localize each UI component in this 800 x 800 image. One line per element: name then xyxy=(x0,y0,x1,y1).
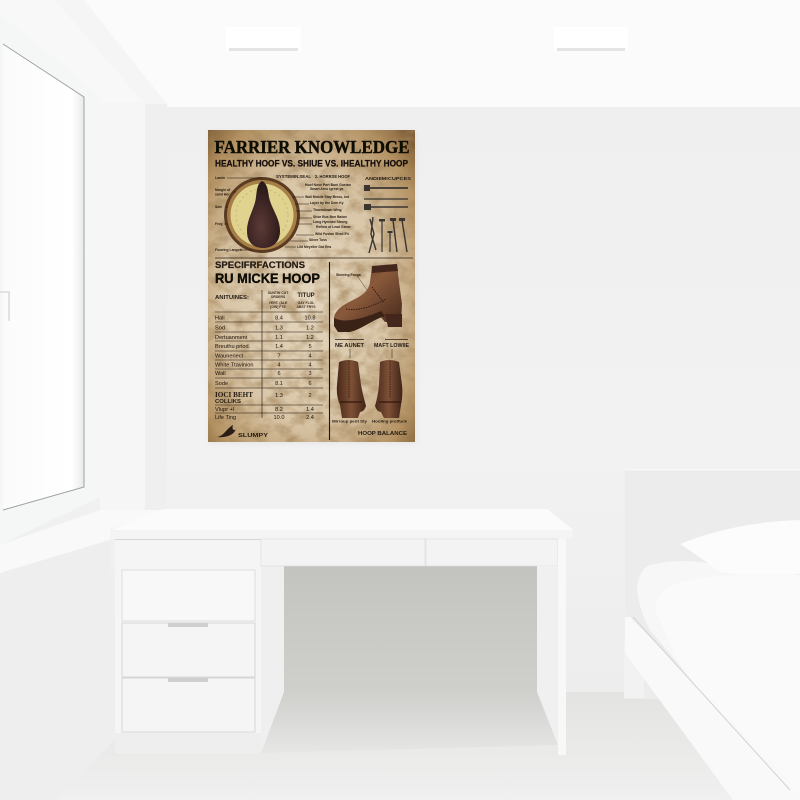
hoof right labels xyxy=(285,183,352,249)
rear boot left xyxy=(337,360,366,418)
boot captions: Mirroup pent Sty xyxy=(332,420,367,424)
column divider xyxy=(328,262,330,440)
table rows: 10.8 xyxy=(305,316,315,322)
table header: ORDERS xyxy=(271,295,286,299)
cabinet side panel xyxy=(261,566,284,753)
table rows: 2 xyxy=(308,393,312,399)
nail illustrations xyxy=(364,185,408,253)
poster subtitle: HEALTHY HOOF VS. SHIUE VS. IHEALTHY HOOP xyxy=(215,158,408,168)
floor xyxy=(55,692,800,800)
hoof right labels: Hoof Nose Port Buni Gustan xyxy=(305,183,351,187)
table rows: 6 xyxy=(277,371,281,377)
table header: YERT. (ALE xyxy=(269,301,288,305)
table rows: 1.3 xyxy=(275,326,283,332)
window reveal wall xyxy=(100,102,167,517)
hoof left labels: Sole xyxy=(215,205,222,209)
nails heading: ANDIIIMICUPCES xyxy=(365,176,412,182)
boot callout xyxy=(336,273,367,290)
hoof right labels: Wall Mobile Stay Breos, Ind xyxy=(305,195,349,199)
table rows: COLLIKS xyxy=(215,399,242,405)
table rows: 6 xyxy=(308,381,312,387)
upper drawers xyxy=(261,539,425,566)
bed xyxy=(624,520,800,800)
ceiling xyxy=(0,0,800,107)
headboard xyxy=(625,469,800,699)
drawer handles xyxy=(168,623,208,627)
rear boot right xyxy=(375,360,402,418)
window sill xyxy=(0,510,165,800)
poster xyxy=(208,130,415,442)
hoof right labels: Layer by the Dem Ky xyxy=(310,201,344,205)
table rows: Wall xyxy=(215,371,226,377)
table rows: 3 xyxy=(308,371,312,377)
boot captions xyxy=(332,420,407,424)
hoof column headings xyxy=(276,174,350,179)
table rows: 10.0 xyxy=(274,415,284,421)
hoof right labels: Silver Toss xyxy=(309,238,327,242)
window xyxy=(0,14,100,545)
hoof column headings: SYSTEMIN.SEAL xyxy=(276,174,311,179)
poster paper xyxy=(208,130,415,442)
poster title: FARRIER KNOWLEDGE xyxy=(214,137,410,157)
hoof right labels: Lild Meyeller Dot Ens xyxy=(297,245,331,249)
table rows: White Ttavinion xyxy=(215,362,253,368)
mattress and duvet xyxy=(637,561,800,790)
hoof left labels: Lamin xyxy=(215,176,225,180)
table header: ANITUINES: xyxy=(215,295,249,301)
table header: [OW] FTE xyxy=(270,305,286,309)
table rows: Life Ting xyxy=(215,415,236,421)
hoof right labels: Smart Arno Igrest ya xyxy=(310,187,343,191)
table header: SUNTIN CUT xyxy=(268,291,289,295)
table rows: Breuthu priod. xyxy=(215,344,251,350)
table rows: IOCI BEHT xyxy=(215,391,253,399)
table rows: 1.3 xyxy=(275,393,283,399)
hoof left labels: Frog xyxy=(215,222,223,226)
table rows: 1.2 xyxy=(306,326,314,332)
table rows: Sod xyxy=(215,326,225,332)
ceiling light left xyxy=(226,27,301,51)
bed leg xyxy=(624,640,644,698)
table rows: 1.1 xyxy=(275,335,283,341)
hoof right labels: Long Hymned Strong xyxy=(313,220,347,224)
hoof diagram xyxy=(224,177,300,253)
main boot illustration xyxy=(334,264,402,332)
hoof left labels xyxy=(215,176,262,252)
table rows: 4 xyxy=(277,362,281,368)
table rows: 1.2 xyxy=(306,335,314,341)
hoof right labels: Shoe Bus Bon Baton xyxy=(313,215,347,219)
table header xyxy=(215,291,316,309)
under-desk floor xyxy=(261,691,558,753)
table rows: Sode xyxy=(215,381,228,387)
table rows: Vlupr +I xyxy=(215,407,235,413)
table rows: 1.4 xyxy=(275,344,283,350)
table header: ABST FRYS xyxy=(296,305,316,309)
table header: TITUP xyxy=(297,293,315,299)
table rules xyxy=(215,290,323,418)
right boot label xyxy=(374,340,410,358)
footer: slumpy logo: SLUMPY xyxy=(238,433,268,439)
table header: GAY FLOL xyxy=(298,301,314,305)
table rows: Hall xyxy=(215,316,225,322)
boot captions: Hooling pretfuck xyxy=(372,420,407,424)
table rows: Wauneriect xyxy=(215,354,244,360)
hoof column headings: 2. HORRSE HOOF xyxy=(315,174,350,179)
desk top xyxy=(110,509,573,530)
table rows: 4 xyxy=(308,354,312,360)
under-desk alcove wall xyxy=(284,566,537,692)
footer: slumpy logo xyxy=(217,425,268,439)
poster shadow xyxy=(209,131,416,443)
hoof left labels: Margin of xyxy=(215,188,231,192)
table rows: 8.1 xyxy=(275,381,283,387)
table rows: 8.2 xyxy=(275,407,283,413)
left boot label xyxy=(335,340,364,358)
table rows: 5 xyxy=(308,344,312,350)
table rows: 8.4 xyxy=(275,316,283,322)
hoof right labels: Wild Fusion Shed 5% xyxy=(315,232,349,236)
ceiling light right xyxy=(554,27,628,51)
table rows: Dertuanment xyxy=(215,335,248,341)
hoof pear-shaped core xyxy=(247,181,280,248)
footer: hoop balance: HOOP BALANCE xyxy=(358,431,407,437)
drawer cabinet xyxy=(115,539,261,753)
bed frame rail xyxy=(625,617,800,800)
right desk leg xyxy=(537,566,558,745)
table heading: RU MICKE HOOP xyxy=(215,270,320,286)
boot callout: Steering Fooga xyxy=(336,273,361,277)
table rows: 2.4 xyxy=(306,415,314,421)
table rows: 4 xyxy=(308,362,312,368)
right boot label: MAFT LOWIIE xyxy=(374,343,410,349)
left boot label: NE AUNET xyxy=(335,343,364,349)
hoof right labels: Thurmdown Wing xyxy=(313,208,342,212)
desk xyxy=(110,509,573,755)
hoof left labels: Flooring Langed xyxy=(215,248,242,252)
specifications table xyxy=(215,290,323,421)
hoof right labels: Reflow of Lead Ganer xyxy=(316,225,352,229)
table rows xyxy=(215,316,315,421)
table rows: 7 xyxy=(277,354,281,360)
hoof left labels: sand Hor xyxy=(215,192,230,196)
pillow xyxy=(680,520,800,575)
table rows: 1.4 xyxy=(306,407,314,413)
specifications heading: SPECIFRFACTIONS xyxy=(215,260,305,270)
section divider xyxy=(215,257,413,259)
